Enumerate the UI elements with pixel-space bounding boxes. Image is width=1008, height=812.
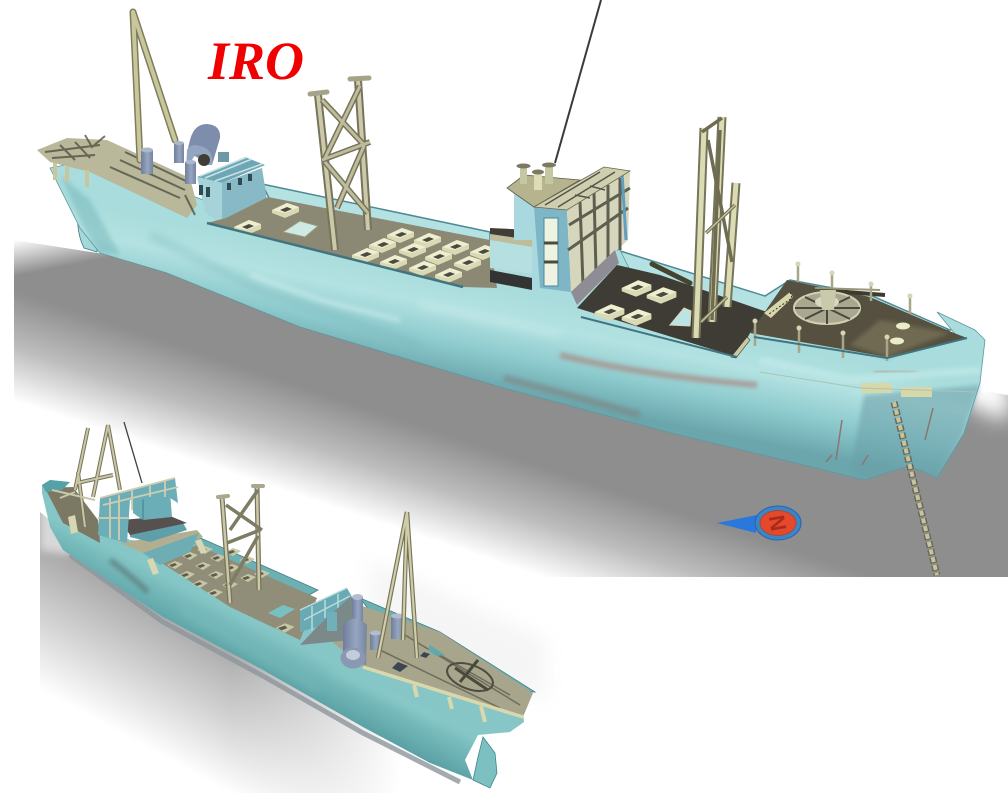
stern rail: [55, 163, 87, 187]
anchor winch: [794, 288, 885, 324]
hull shading and rust marks: [60, 175, 980, 480]
ladders: [731, 292, 793, 358]
aft deck detail: [363, 632, 523, 722]
forward mast tower: [75, 425, 120, 527]
aft A-mast: [378, 512, 417, 658]
well deck: [207, 197, 497, 288]
forward well deck: [577, 265, 767, 357]
rudder: [473, 737, 497, 788]
cast shadow behind lower ship: [40, 500, 546, 793]
bow rail and fittings: [42, 480, 207, 575]
far bulwark: [190, 536, 535, 692]
hull marks: [110, 560, 440, 720]
well deck: [157, 545, 317, 640]
far bulwark: [262, 184, 950, 340]
rudder: [78, 208, 97, 252]
aft bridge block: [197, 157, 267, 225]
cast shadow behind upper ship: [14, 200, 1008, 577]
anchor chain: [894, 402, 937, 575]
midship cross mast: [310, 78, 370, 250]
forward hatches: [595, 280, 691, 326]
bow deck: [750, 280, 967, 357]
main deck rail edge: [207, 223, 463, 287]
small hatches: [167, 546, 295, 633]
aft deck: [330, 600, 533, 717]
deck hatches: [234, 203, 497, 283]
antenna: [555, 0, 601, 163]
midship superstructure: [490, 162, 630, 305]
lower ship: [42, 422, 535, 788]
bollards and deck lights: [752, 262, 912, 361]
compass marker: [717, 506, 801, 540]
compass marker: N: [764, 513, 791, 533]
antenna: [124, 422, 142, 483]
bow deck: [45, 487, 100, 543]
vents and cowl: [141, 124, 229, 184]
forward superstructure: [98, 478, 203, 565]
near deck rail forward: [581, 317, 967, 358]
keel shadow: [70, 555, 460, 782]
title: IRO: IRO: [207, 31, 304, 91]
upper ship: [37, 0, 985, 575]
aft mast: [133, 12, 175, 160]
cowl and vents: [340, 594, 404, 668]
main hull: [50, 160, 985, 480]
mid cross mast: [218, 486, 263, 603]
aft box: [300, 588, 362, 645]
hull: [42, 480, 524, 780]
foremast: [696, 117, 736, 338]
stern deck: [37, 138, 197, 218]
boom: [652, 264, 690, 283]
stern deck detail: [45, 135, 195, 215]
